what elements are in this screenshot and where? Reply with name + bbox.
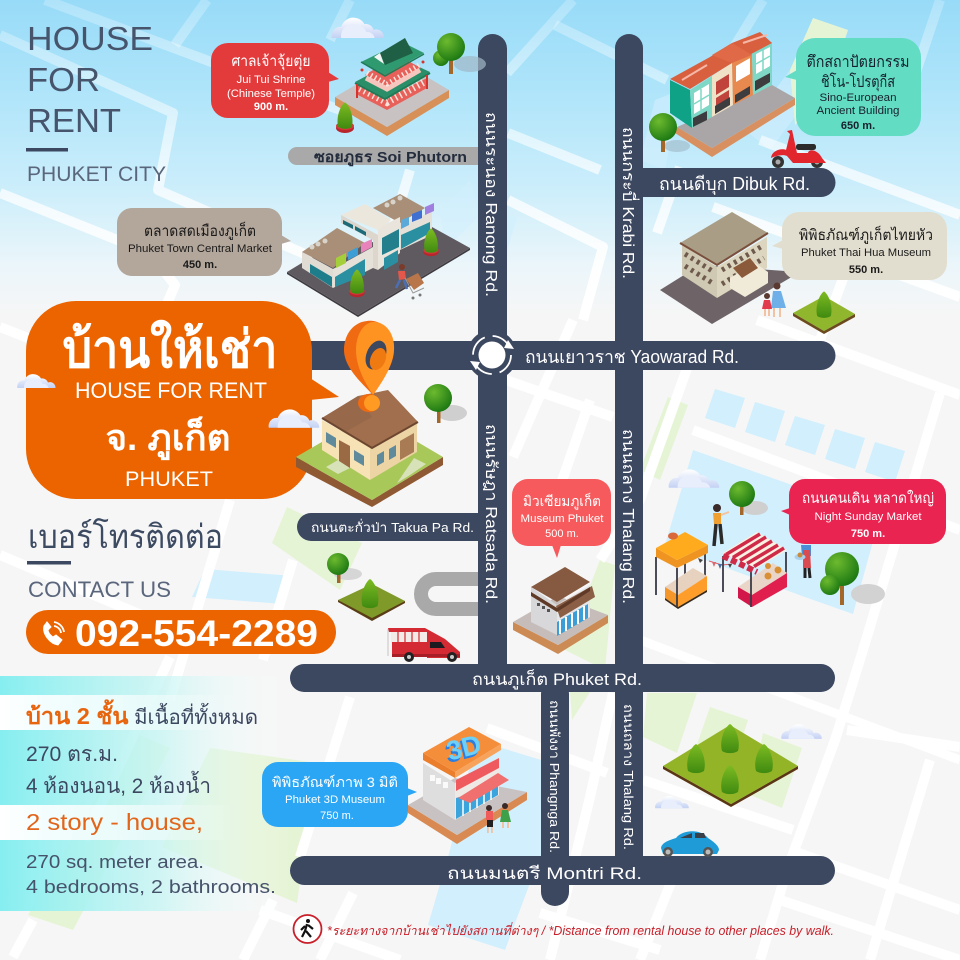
icon: cloud [669, 469, 719, 488]
callout: Night Sunday Market [781, 479, 946, 544]
icon: shopper with cart [396, 264, 424, 300]
footnote [294, 915, 834, 943]
icon: potted shrub [336, 102, 354, 133]
callout: market: ตลาดสดเมืองภูเก็ต [144, 221, 256, 240]
callout: Jui Tui [211, 43, 339, 118]
details: English area: 270 sq. meter area. [26, 852, 204, 872]
icon: cloud over house [269, 409, 319, 428]
callout: Sino-European: ชิโน-โปรตุกีส [821, 72, 895, 92]
roundabout [467, 330, 517, 380]
landmark: Thai Hua museum [660, 212, 947, 334]
contact subheading: CONTACT US [28, 577, 171, 602]
road label: Phangnga: ถนนพังงา Phangnga Rd. [547, 700, 562, 853]
road: Phuket: ถนนภูเก็ต Phuket Rd. [472, 668, 642, 690]
icon: museum building [660, 212, 800, 324]
road: Yaowarad: ถนนเยาวราช Yaowarad Rd. [525, 347, 739, 367]
phone pill: 092-554-2289 [75, 613, 318, 654]
icon: large tree [820, 552, 885, 605]
details: English heading: 2 story - house, [26, 809, 203, 835]
small landscape: tree, tile, truck [327, 553, 460, 662]
callout: Museum Phuket: Museum Phuket [520, 513, 604, 525]
subtitle: PHUKET CITY [27, 163, 166, 186]
road: Dibuk: ถนนดีบุก Dibuk Rd. [659, 174, 810, 195]
road: Soi Phutorn [288, 147, 480, 167]
icon: phone [44, 622, 64, 645]
icon: tree [433, 33, 486, 74]
road label: Thalang lower: ถนนถลาง Thalang Rd. [621, 704, 636, 850]
contact block [26, 518, 336, 654]
road: service loop [421, 579, 480, 609]
main callout: house for rent: จ. ภูเก็ต [106, 415, 230, 461]
icon: walking person [294, 915, 322, 943]
main callout: house for rent: HOUSE FOR RENT [75, 378, 267, 403]
landmark: Museum Phuket [512, 479, 611, 654]
callout: Night Sunday Market: Night Sunday Market [814, 511, 922, 523]
landmark: Jui Tui shrine [211, 18, 486, 136]
icon: shophouses [670, 32, 795, 157]
road: Dibuk [630, 168, 836, 197]
road: Montri: ถนนมนตรี Montri Rd. [447, 864, 642, 883]
road: Ranong and Ratsada [478, 34, 507, 684]
icon: red songthaew truck [388, 628, 460, 662]
callout: Sino-European [785, 38, 921, 136]
road: Phangnga [541, 680, 569, 906]
callout: Night Sunday Market: 750 m. [851, 528, 885, 540]
details: Thai area: 270 ตร.ม. [26, 743, 118, 766]
icon: striped food stall [723, 532, 787, 607]
icon: blue car [661, 831, 719, 857]
landmark: 3D museum [262, 727, 527, 844]
callout: Thai Hua: พิพิธภัณฑ์ภูเก็ตไทยหัว [799, 225, 933, 244]
road label: Thalang upper: ถนนถลาง Thalang Rd. [619, 429, 636, 604]
contact heading: เบอร์โทรติดต่อ [28, 518, 223, 555]
callout: Museum Phuket: มิวเซียมภูเก็ต [523, 492, 601, 510]
callout: Jui Tui: (Chinese Temple) [227, 88, 315, 100]
icon: grass tile [338, 579, 405, 621]
title: HOUSE [27, 20, 153, 57]
callout: Museum Phuket: 500 m. [545, 528, 579, 540]
title block [26, 20, 166, 186]
icon: tree [327, 553, 362, 583]
icon: orange food stall [656, 532, 708, 609]
callout: 3D museum: พิพิธภัณฑ์ภาพ 3 มิติ [272, 774, 398, 790]
icon: lawn with trees [663, 724, 798, 804]
callout: Sino-European: Ancient Building [816, 105, 900, 117]
road: Montri [290, 856, 835, 885]
icon: bunting [698, 558, 732, 569]
callout: Museum Phuket [512, 479, 611, 558]
callout: Sino-European: Sino-European [820, 92, 896, 104]
park [655, 724, 822, 857]
icon: museum building [513, 567, 608, 654]
callout: Jui Tui: Jui Tui Shrine [236, 74, 306, 86]
icon: 3D roof lettering: 3D [442, 731, 483, 769]
icon: cloud left [17, 374, 55, 388]
callout: market: Phuket Town Central Market [128, 243, 272, 255]
callout: 3D museum: Phuket 3D Museum [285, 794, 385, 806]
callout: Jui Tui: ศาลเจ้าจุ้ยตุ่ย [232, 53, 310, 71]
icon: visitors [486, 803, 511, 833]
title rule [26, 148, 68, 152]
icon: tree [649, 113, 690, 152]
details backdrop strip [0, 676, 290, 911]
footnote text: *ระยะทางจากบ้านเช่าไปยังสถานที่ต่างๆ / *Distance from rental house to other places by walk. [327, 922, 834, 938]
landmark: Night Sunday Market [656, 469, 946, 609]
landmark: central market [117, 194, 470, 317]
icon: cloud [332, 18, 384, 38]
icon: woman visitor [713, 504, 729, 546]
road: Phuket [290, 664, 835, 692]
callout: market [117, 208, 291, 276]
icon: 3D museum building [408, 727, 527, 844]
callout: Night Sunday Market: ถนนคนเดิน หลาดใหญ่ [802, 489, 934, 507]
road: Yaowarad [310, 341, 836, 370]
contact rule [27, 561, 71, 564]
icon: tree by house [424, 384, 467, 423]
callout: Sino-European: 650 m. [841, 120, 875, 132]
road: Krabi and Thalang [615, 34, 643, 874]
main callout: house for rent [26, 301, 339, 499]
icon: cloud lower [655, 796, 689, 808]
callout: Thai Hua: 550 m. [849, 264, 883, 276]
icon: rental house [296, 390, 443, 507]
title: RENT [27, 102, 121, 139]
callout: 3D museum: 750 m. [320, 810, 354, 822]
main callout: house for rent: บ้านให้เช่า [62, 319, 278, 379]
icon: scooter [771, 130, 826, 168]
phone pill [26, 610, 336, 654]
icon: cloud upper [781, 724, 822, 739]
callout: Thai Hua: Phuket Thai Hua Museum [801, 247, 931, 259]
icon: 3D roof lettering: 3D [444, 729, 484, 766]
callout: Jui Tui: 900 m. [254, 101, 288, 113]
main callout: house for rent: PHUKET [125, 468, 213, 491]
icon: potted shrubs [349, 228, 439, 297]
title [27, 20, 153, 139]
title: FOR [27, 61, 100, 98]
road: Soi Phutorn: ซอยภูธร Soi Phutorn [314, 149, 467, 167]
callout: market: 450 m. [183, 259, 217, 271]
road label: Ranong: ถนนระนอง Ranong Rd. [482, 112, 499, 297]
details: English rooms: 4 bedrooms, 2 bathrooms. [26, 877, 276, 897]
water blocks [192, 70, 905, 950]
landmark: Sino-European building [649, 32, 921, 168]
property details [26, 699, 276, 897]
details: Thai rooms: 4 ห้องนอน, 2 ห้องน้ำ [26, 771, 211, 798]
road network [288, 34, 836, 906]
road: Takua Pa [297, 513, 480, 541]
details: Thai heading: บ้าน 2 ชั้น มีเนื้อที่ทั้งหมด [26, 699, 258, 729]
icon: temple [335, 38, 449, 136]
road: Takua Pa: ถนนตะกั่วป่า Takua Pa Rd. [311, 519, 474, 535]
callout: 3D museum [262, 762, 417, 827]
callout: Thai Hua [772, 212, 947, 280]
road label: Ratsada: ถนนรัษฎา Ratsada Rd. [482, 424, 499, 604]
icon: tree [729, 481, 768, 515]
icon: park tile [663, 766, 798, 807]
road label: Krabi: ถนนกระบี่ Krabi Rd. [619, 127, 640, 279]
icon: market building [287, 194, 470, 317]
icon: location pin [344, 321, 394, 412]
callout: Sino-European: ตึกสถาปัตยกรรม [806, 54, 910, 71]
icon: vendor [794, 536, 811, 578]
icon: grass tile with shrub [793, 291, 855, 334]
icon: family [762, 282, 786, 317]
